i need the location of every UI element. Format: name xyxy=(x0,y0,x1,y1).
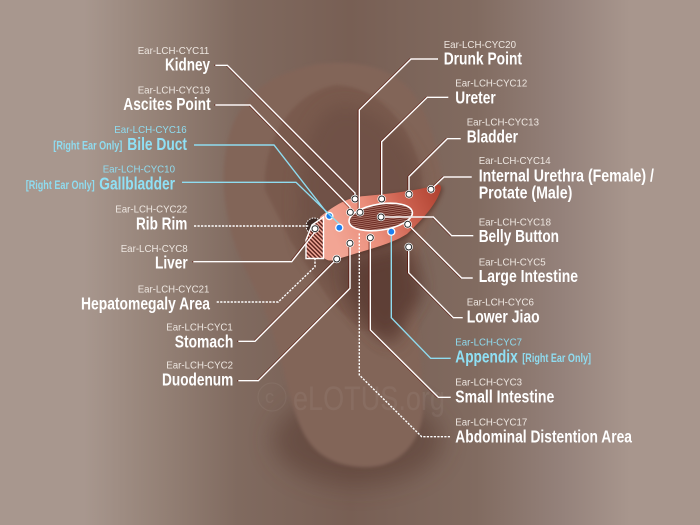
callout: Duodenum: Duodenum xyxy=(162,369,233,389)
callout: Large Intestine: Ear-LCH-CYC5 xyxy=(479,256,546,268)
callout: Appendix: Ear-LCH-CYC7 xyxy=(455,337,522,349)
callout: Gallbladder: Gallbladder xyxy=(99,173,175,193)
callout: Hepatomegaly Area: Hepatomegaly Area xyxy=(81,293,210,313)
callout: Bile Duct: Bile Duct xyxy=(127,134,187,154)
callout: Ureter: Ureter xyxy=(455,87,496,107)
callout: Internal Urethra / Protate: Ear-LCH-CYC14 xyxy=(479,155,551,167)
watermark: eLOTUS.org xyxy=(293,380,445,418)
callout: Internal Urethra / Protate: Internal Urethra (Female) / xyxy=(479,165,654,185)
callout: Appendix: [Right Ear Only] xyxy=(522,353,591,365)
callout: Bladder: Ear-LCH-CYC13 xyxy=(467,117,539,129)
callout: Large Intestine xyxy=(404,220,578,286)
watermark xyxy=(258,380,445,418)
callout: Internal Urethra / Protate xyxy=(427,155,654,202)
callout: Liver: Liver xyxy=(155,253,188,273)
callout: Bladder xyxy=(405,117,539,198)
callout: Drunk Point: Drunk Point xyxy=(444,49,522,69)
callout: Appendix: Appendix xyxy=(455,346,518,366)
callout: Small Intestine: Ear-LCH-CYC3 xyxy=(455,377,522,389)
abdominal ellipse xyxy=(347,199,414,235)
callout: Lower Jiao xyxy=(404,243,540,326)
callout: Bile Duct: Ear-LCH-CYC16 xyxy=(114,124,187,136)
callout: Ureter: Ear-LCH-CYC12 xyxy=(455,78,527,90)
callout: Small Intestine: Small Intestine xyxy=(455,386,555,406)
callout: Stomach: Stomach xyxy=(175,332,233,352)
callout: Bile Duct xyxy=(53,124,333,220)
callout: Ureter xyxy=(378,78,527,203)
callout: Belly Button: Belly Button xyxy=(479,226,559,246)
red reflex zone xyxy=(320,185,441,261)
callout: Belly Button xyxy=(377,213,559,246)
callout: Ascites Point: Ascites Point xyxy=(123,94,211,114)
callout: Rib Rim: Ear-LCH-CYC22 xyxy=(115,204,187,216)
callout: Duodenum: Ear-LCH-CYC2 xyxy=(166,360,233,372)
callout: Bile Duct: [Right Ear Only] xyxy=(53,140,122,152)
callout: Gallbladder xyxy=(26,164,343,232)
callout: Kidney: Kidney xyxy=(165,55,210,75)
callout: Small Intestine xyxy=(366,234,555,406)
callout: Abdominal Distention Area xyxy=(359,233,632,446)
callout: Abdominal Distention Area: Abdominal Distention Area xyxy=(455,426,632,446)
watermark: c xyxy=(265,387,274,407)
callout: Stomach xyxy=(166,255,341,352)
callout: Large Intestine: Large Intestine xyxy=(479,266,578,286)
callout: Lower Jiao: Lower Jiao xyxy=(467,306,540,326)
ear illustration xyxy=(224,63,443,485)
callout: Hepatomegaly Area xyxy=(81,259,315,313)
callout: Liver xyxy=(121,224,319,273)
callout: Liver: Ear-LCH-CYC8 xyxy=(121,243,188,255)
callout: Stomach: Ear-LCH-CYC1 xyxy=(166,322,233,334)
callout: Ascites Point xyxy=(123,84,354,216)
callout: Kidney: Ear-LCH-CYC11 xyxy=(138,45,209,57)
liver hatched area xyxy=(306,217,324,258)
callout: Drunk Point: Ear-LCH-CYC20 xyxy=(444,39,516,51)
callout: Belly Button: Ear-LCH-CYC18 xyxy=(479,216,551,228)
callout: Hepatomegaly Area: Ear-LCH-CYC21 xyxy=(138,284,209,296)
callout: Abdominal Distention Area: Ear-LCH-CYC17 xyxy=(455,417,527,429)
rib rim dark area xyxy=(306,218,322,234)
callout: Rib Rim: Rib Rim xyxy=(136,213,187,233)
callout: Lower Jiao: Ear-LCH-CYC6 xyxy=(467,296,534,308)
callout: Drunk Point xyxy=(356,39,522,216)
callout: Appendix xyxy=(387,228,591,366)
callout: Rib Rim xyxy=(115,204,309,233)
callout: Duodenum xyxy=(162,239,354,389)
callout: Bladder: Bladder xyxy=(467,126,518,146)
callout: Kidney xyxy=(138,45,359,203)
callout: Internal Urethra / Protate: Protate (Male) xyxy=(479,182,572,202)
callout: Gallbladder: Ear-LCH-CYC10 xyxy=(103,164,175,176)
callout: Ascites Point: Ear-LCH-CYC19 xyxy=(138,84,210,96)
callout: Gallbladder: [Right Ear Only] xyxy=(26,180,95,192)
